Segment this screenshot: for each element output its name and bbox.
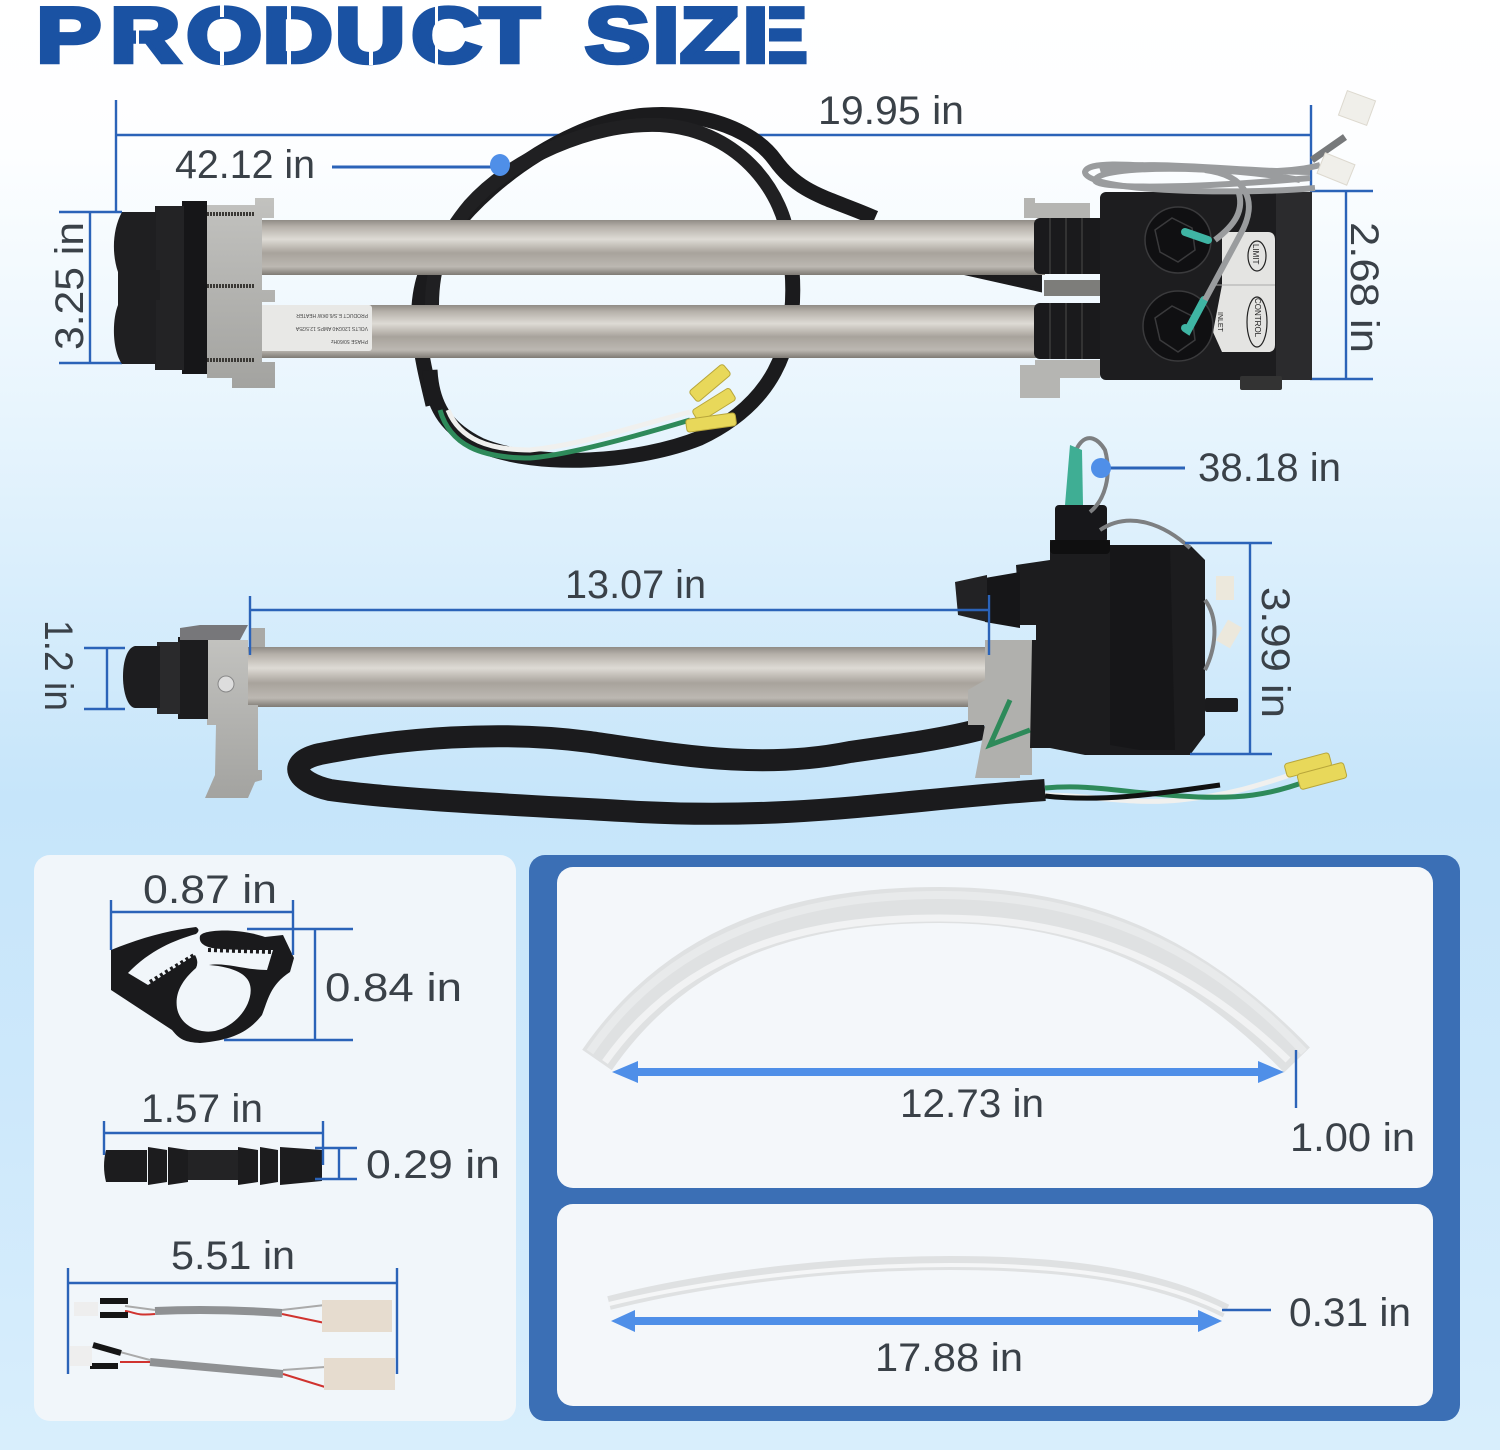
label: 0.29 in: 0.29 in [366, 1143, 500, 1187]
side terminals [1284, 752, 1347, 790]
icon: hose clamp [111, 927, 294, 1043]
label: 1.00 in: 1.00 in [1290, 1116, 1415, 1160]
heater top view [114, 91, 1376, 460]
ground wire [990, 700, 1030, 745]
grey wire bundle [1085, 137, 1345, 300]
tick: 1.00 in [1295, 1050, 1297, 1108]
dimension lines: accessories [68, 900, 397, 1374]
dimension lines: top heater [59, 100, 1373, 379]
left end cap and bracket [114, 198, 275, 388]
arrow: 17.88 in [611, 1310, 1222, 1332]
brackets right side [1020, 198, 1100, 398]
tick: 0.31 in [1222, 1309, 1271, 1311]
box labels: CONTROL [1253, 298, 1262, 338]
right bracket [968, 640, 1032, 778]
right hose barbs [1034, 218, 1110, 359]
label: 0.87 in: 0.87 in [143, 868, 277, 912]
arrow: 12.73 in [612, 1061, 1284, 1083]
rating label: PHASE 50/60Hz [331, 338, 368, 344]
label: 0.31 in: 0.31 in [1289, 1291, 1411, 1335]
label: 1.57 in: 1.57 in [141, 1087, 263, 1131]
heater body [955, 505, 1238, 755]
panel: large tube [557, 867, 1433, 1188]
label: 13.07 in: 13.07 in [565, 563, 706, 607]
label: 17.88 in: 17.88 in [875, 1336, 1023, 1380]
control box [1100, 192, 1312, 390]
icon: hose barb connector [104, 1147, 322, 1185]
label: 2.68 in: 2.68 in [1342, 222, 1386, 353]
green sleeve [1065, 445, 1083, 505]
label: 38.18 in: 38.18 in [1198, 446, 1341, 490]
callout dot 38.18 in [1091, 458, 1111, 478]
fittings [1143, 207, 1213, 361]
rating label: VOLTS 120/240 AMPS 12.5/25A [295, 325, 368, 331]
green sleeves [1185, 232, 1208, 330]
tube [245, 647, 990, 707]
callout dot 42.12 in [490, 154, 510, 176]
box labels: INLET [1216, 312, 1223, 333]
panel: tubing [529, 855, 1460, 1421]
grey wires and connectors [1072, 438, 1214, 670]
label: 42.12 in: 42.12 in [175, 143, 315, 187]
rating label: PRODUCT E.S/6.0KW HEATER [296, 312, 368, 318]
spade terminals [685, 363, 737, 432]
label: 12.73 in: 12.73 in [900, 1082, 1044, 1126]
left end and foot [123, 625, 265, 798]
rating label [255, 305, 372, 351]
icon: large clear tube [590, 895, 1304, 1062]
heater side view [123, 438, 1347, 814]
panel: small tube [557, 1204, 1433, 1406]
label: 5.51 in: 5.51 in [171, 1234, 295, 1278]
label: 0.84 in: 0.84 in [325, 966, 462, 1010]
label: 1.2 in: 1.2 in [36, 620, 80, 711]
dimension lines: side heater [84, 468, 1272, 754]
cord [298, 728, 1310, 814]
box labels [1213, 232, 1275, 352]
box labels: LIMIT [1251, 244, 1260, 265]
label: 3.25 in: 3.25 in [48, 222, 92, 350]
label: 19.95 in: 19.95 in [818, 89, 964, 133]
side connectors [1216, 576, 1242, 648]
label: 3.99 in: 3.99 in [1253, 587, 1297, 718]
panel: accessories [34, 855, 516, 1421]
icon: wire harnesses [70, 1300, 395, 1390]
power cord loop [419, 115, 1040, 460]
connectors [1317, 91, 1376, 185]
icon: small clear tube [609, 1263, 1226, 1312]
stainless tubes [245, 220, 1045, 358]
